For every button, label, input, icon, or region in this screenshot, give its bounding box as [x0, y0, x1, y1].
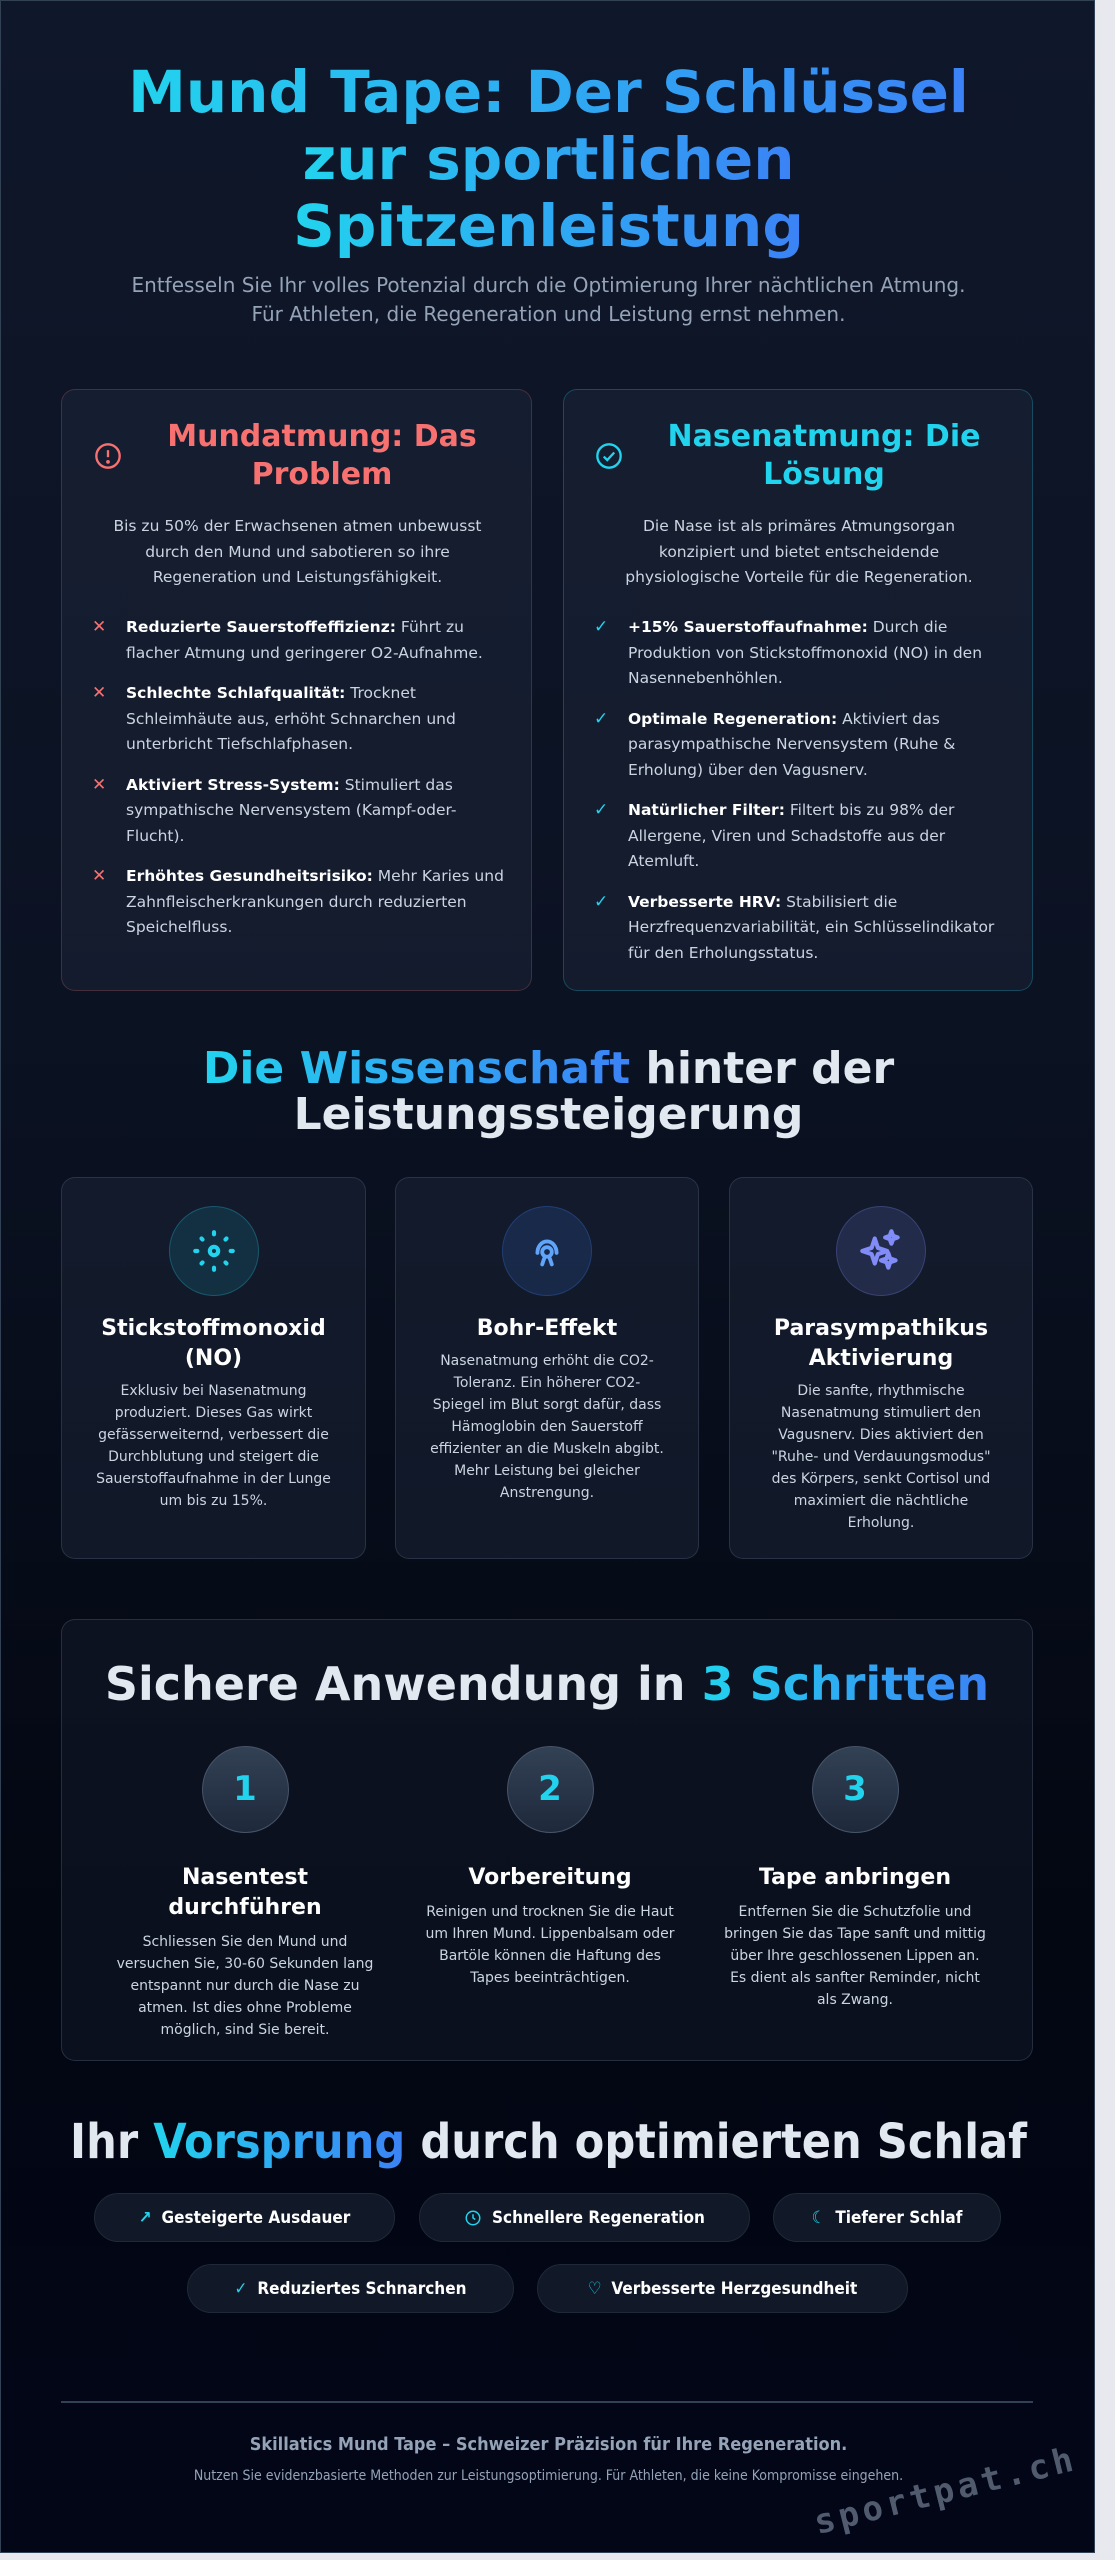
bullet list: problems: Aktiviert Stress-System: Stimuliert das sympathische Nervensystem (Kampf-oder-Flucht).: [126, 776, 456, 844]
panel: parasympathetic: [729, 1177, 1033, 1559]
pill: regeneration: [419, 2193, 750, 2242]
heading: advantage: Ihr Vorsprung durch optimierten Schlaf: [70, 2114, 1027, 2170]
title: Spitzenleistung: [293, 192, 804, 260]
step 2: Vorbereitung: [468, 1865, 632, 1890]
panel: 3 steps: [61, 1619, 1033, 2061]
icon: check circle: [596, 443, 622, 469]
panel: parasympathetic: Parasympathikus: [774, 1316, 988, 1341]
footer: [194, 2434, 903, 2484]
pill: deep sleep: [773, 2193, 1001, 2242]
pill: endurance: ↗: [139, 2208, 152, 2228]
icon: sun dots: [168, 1206, 258, 1296]
bullet list: problems: Schlechte Schlafqualität: Trocknet Schleimhäute aus, erhöht Schnarchen und unterbricht Tiefschlafphasen.: [126, 684, 456, 753]
bullet list: problems: ✕: [92, 774, 106, 794]
bullet list: benefits: ✓: [594, 892, 608, 912]
panel: nitric oxide: [61, 1177, 366, 1559]
bullet list: benefits: Natürlicher Filter: Filtert bis zu 98% der Allergene, Viren und Schadstoffe aus der Atemluft.: [628, 801, 954, 870]
step 3: 3: [843, 1769, 867, 1809]
heading: science: Die Wissenschaft hinter der: [203, 1043, 894, 1094]
pill: heart: Verbesserte Herzgesundheit: [611, 2278, 857, 2298]
step 1: durchführen: [168, 1895, 322, 1920]
panel: nitric oxide: Stickstoffmonoxid: [101, 1316, 326, 1341]
heading: science: Leistungssteigerung: [294, 1089, 803, 1140]
pill: snoring: ✓: [235, 2278, 247, 2298]
pill: endurance: Gesteigerte Ausdauer: [162, 2208, 350, 2228]
title: zur sportlichen: [302, 125, 795, 193]
bullet list: problems: ✕: [92, 683, 106, 703]
panel: bohr effect: [395, 1177, 699, 1559]
bullet list: problems: ✕: [92, 866, 106, 886]
step 3: [724, 1746, 986, 2008]
title: [128, 58, 969, 260]
step 2: Reinigen und trocknen Sie die Haut um Ihren Mund. Lippenbalsam oder Bartöle können die Haftung des Tapes beeinträchtigen.: [425, 1904, 675, 1986]
bullet list: benefits: [594, 617, 994, 962]
pill: heart: ♡: [588, 2278, 601, 2298]
bullet list: problems: Erhöhtes Gesundheitsrisiko: Mehr Karies und Zahnfleischerkrankungen durch reduzierten Speichelfluss.: [126, 867, 504, 936]
pill: snoring: [187, 2264, 514, 2313]
step 1: Schliessen Sie den Mund und versuchen Sie, 30-60 Sekunden lang entspannt nur durch die Nase zu atmen. Ist dies ohne Probleme möglich, sind Sie bereit.: [117, 1934, 373, 2038]
step 3: Tape anbringen: [759, 1865, 951, 1890]
step 1: 1: [233, 1769, 257, 1809]
bullet list: benefits: Optimale Regeneration: Aktiviert das parasympathische Nervensystem (Ruhe & Erholung) über den Vagusnerv.: [628, 710, 955, 778]
bullet list: benefits: Verbesserte HRV: Stabilisiert die Herzfrequenzvariabilität, ein Schlüsselindikator für den Erholungsstatus.: [628, 892, 994, 962]
bullet list: benefits: ✓: [594, 617, 608, 637]
bullet list: problems: ✕: [92, 617, 106, 637]
watermark: sportpat.ch: [810, 2439, 1081, 2543]
step 2: 2: [538, 1769, 562, 1809]
text block: Die Nase ist als primäres Atmungsorgan konzipiert und bietet entscheidende physiologische Vorteile für die Regeneration.: [625, 517, 973, 586]
pill: snoring: Reduziertes Schnarchen: [257, 2278, 466, 2298]
step 1: [117, 1746, 373, 2038]
panel: mouth breathing problem: [61, 389, 532, 991]
panel: nitric oxide: Exklusiv bei Nasenatmung produziert. Dieses Gas wirkt gefässerweiternd, verbessert die Durchblutung und steigert die Sauerstoffaufnahme in der Lunge um bis zu 15%.: [96, 1383, 331, 1509]
pill: deep sleep: Tieferer Schlaf: [835, 2208, 962, 2228]
bullet list: problems: Reduzierte Sauerstoffeffizienz: Führt zu flacher Atmung und geringerer O2-Aufnahme.: [126, 618, 483, 662]
text block: Bis zu 50% der Erwachsenen atmen unbewusst durch den Mund und sabotieren so ihre Regeneration und Leistungsfähigkeit.: [113, 517, 482, 586]
subtitle: Entfesseln Sie Ihr volles Potenzial durch die Optimierung Ihrer nächtlichen Atmung. Für Athleten, die Regeneration und Leistung ernst nehmen.: [132, 273, 965, 326]
heading: Mundatmung: Das Problem: [167, 419, 477, 492]
heading: science: [203, 1043, 894, 1140]
pill: heart: [537, 2264, 908, 2313]
panel: parasympathetic: Aktivierung: [809, 1346, 953, 1371]
panel: parasympathetic: Die sanfte, rhythmische Nasenatmung stimuliert den Vagusnerv. Dies aktiviert den "Ruhe- und Verdauungsmodus" des Körpers, senkt Cortisol und maximiert die nächtliche Erholung.: [771, 1383, 991, 1531]
panel: nasal breathing solution: [563, 389, 1033, 991]
step 2: [425, 1746, 675, 1986]
panel: nitric oxide: (NO): [185, 1346, 242, 1371]
title: Mund Tape: Der Schlüssel: [128, 58, 969, 126]
bullet list: benefits: ✓: [594, 708, 608, 728]
icon: sparkles: [836, 1206, 926, 1296]
pill: regeneration: Schnellere Regeneration: [492, 2208, 705, 2228]
bullet list: benefits: ✓: [594, 800, 608, 820]
footer: Nutzen Sie evidenzbasierte Methoden zur Leistungsoptimierung. Für Athleten, die keine Kompromisse eingehen.: [194, 2468, 903, 2484]
panel: bohr effect: Bohr-Effekt: [477, 1316, 617, 1341]
heading: Sichere Anwendung in 3 Schritten: [105, 1657, 989, 1711]
pill: deep sleep: ☾: [812, 2208, 825, 2228]
icon: warning: [95, 443, 121, 469]
step 1: Nasentest: [182, 1865, 308, 1890]
footer: Skillatics Mund Tape – Schweizer Präzision für Ihre Regeneration.: [250, 2434, 847, 2455]
step 3: Entfernen Sie die Schutzfolie und bringen Sie das Tape sanft und mittig über Ihre geschlossenen Lippen an. Es dient als sanfter Reminder, nicht als Zwang.: [724, 1904, 986, 2008]
bullet list: problems: [92, 617, 504, 936]
pill: endurance: [94, 2193, 395, 2242]
icon: person: [502, 1206, 592, 1296]
panel: bohr effect: Nasenatmung erhöht die CO2-Toleranz. Ein höherer CO2-Spiegel im Blut sorgt dafür, dass Hämoglobin den Sauerstoff effizienter an die Muskeln abgibt. Mehr Leistung bei gleicher Anstrengung.: [430, 1353, 664, 1501]
bullet list: benefits: +15% Sauerstoffaufnahme: Durch die Produktion von Stickstoffmonoxid (NO) in den Nasennebenhöhlen.: [628, 618, 982, 687]
heading: Nasenatmung: Die Lösung: [668, 419, 980, 492]
